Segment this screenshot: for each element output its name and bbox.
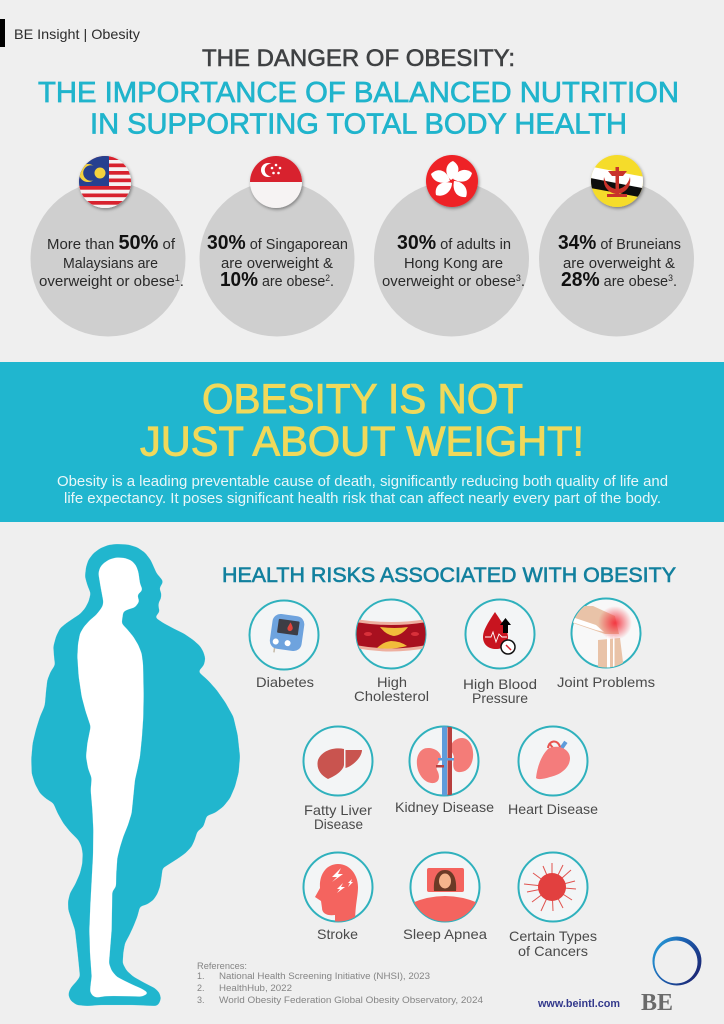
text: Brunei statistic (558, 232, 681, 291)
risk: joint problems (557, 598, 655, 690)
text: Singapore statistic (207, 232, 348, 291)
label: Fatty Liver (304, 802, 372, 818)
text: Malaysia statistic: . (180, 273, 184, 290)
label: High Blood (463, 676, 537, 692)
logo: BE: BE (641, 990, 673, 1016)
icon: Singapore flag (250, 156, 302, 208)
banner body text (57, 473, 668, 507)
icon: blood drop, arrow and gauge (483, 612, 515, 654)
banner: obesity is not just about weight (0, 362, 724, 522)
text: Malaysia statistic: More than 50% of (47, 232, 176, 254)
label (304, 802, 372, 832)
references: References: (197, 961, 247, 971)
icon: glucose meter (268, 613, 305, 656)
text: Brunei statistic: 34% of Bruneians (558, 232, 681, 254)
text: Hong Kong statistic: 3 (516, 273, 521, 283)
panel: Hong Kong statistic (374, 155, 529, 336)
risk: kidney disease (395, 726, 494, 815)
label: Sleep Apnea (403, 926, 487, 942)
icon: Brunei flag (585, 155, 650, 207)
label: Kidney Disease (395, 799, 494, 815)
section tag: BE Insight | Obesity: BE Insight | Obesity (14, 26, 140, 42)
heading: health risks: HEALTH RISKS ASSOCIATED WITH OBESITY (222, 564, 676, 587)
text: Singapore statistic: 10% are obese (220, 269, 329, 291)
risk: cancers (509, 852, 597, 959)
text: Hong Kong statistic (382, 232, 525, 290)
text: Malaysia statistic: Malaysians are (63, 255, 158, 272)
section tag: BE Insight | Obesity (0, 19, 140, 47)
icon: kidneys (417, 726, 473, 796)
references: 2. (197, 983, 205, 993)
banner heading (140, 375, 584, 464)
references (197, 961, 483, 1005)
text: Brunei statistic: are overweight & (563, 255, 675, 272)
label: Certain Types (509, 928, 597, 944)
risk: fatty liver disease (304, 726, 372, 832)
website: www.beintl.com (537, 998, 620, 1010)
text: Hong Kong statistic: Hong Kong are (404, 255, 503, 272)
label (463, 676, 537, 706)
references: World Obesity Federation Global Obesity Observatory, 2024 (219, 995, 483, 1005)
title: THE IMPORTANCE OF BALANCED NUTRITION (38, 77, 679, 109)
risk: high cholesterol (354, 600, 429, 704)
text: Brunei statistic: 3 (668, 273, 673, 283)
label: Diabetes (256, 674, 314, 690)
banner body text: Obesity is a leading preventable cause of death, significantly reducing both quality of life and (57, 473, 668, 490)
icon: Malaysia flag (79, 156, 131, 208)
label: Pressure (472, 690, 528, 706)
label: Disease (314, 816, 363, 832)
references: 1. (197, 971, 205, 981)
label: Stroke (317, 926, 358, 942)
title (38, 45, 679, 140)
text: Brunei statistic: . (673, 273, 677, 290)
icon: sleeping person (414, 868, 476, 922)
text: Malaysia statistic (39, 232, 184, 290)
risk: stroke (304, 852, 372, 942)
panel: Singapore statistic (200, 156, 354, 336)
obese outline (31, 544, 240, 1006)
banner body text: life expectancy. It poses significant health risk that can affect nearly every part of the body. (64, 490, 661, 507)
references: National Health Screening Initiative (NHSI), 2023 (219, 971, 430, 981)
label (354, 674, 429, 704)
icon: knee joint (570, 606, 632, 670)
icon: liver (317, 748, 362, 779)
body silhouette: obese outline with lean figure (31, 544, 240, 1006)
panel: Brunei statistic (539, 155, 694, 336)
lean figure (77, 557, 149, 998)
icon: head with lightning (315, 864, 358, 925)
logo: BE (641, 936, 701, 1016)
text: Singapore statistic: 30% of Singaporean (207, 232, 348, 254)
risk: sleep apnea (403, 852, 487, 942)
text: Malaysia statistic: 1 (175, 273, 180, 283)
label: High (377, 674, 407, 690)
references: HealthHub, 2022 (219, 983, 292, 993)
risk: heart disease (508, 726, 598, 817)
risk: diabetes (250, 600, 318, 690)
text: Malaysia statistic: overweight or obese (39, 273, 174, 290)
references: 3. (197, 995, 205, 1005)
text: Brunei statistic: 28% are obese (561, 269, 671, 291)
label (509, 928, 597, 959)
label: Joint Problems (557, 674, 655, 690)
icon: blood vessel with plaque (355, 619, 427, 652)
text: Hong Kong statistic: 30% of adults in (397, 232, 511, 254)
title: THE DANGER OF OBESITY: (202, 45, 515, 72)
panel: Malaysia statistic (30, 156, 186, 336)
banner heading: JUST ABOUT WEIGHT! (140, 418, 584, 464)
icon: Hong Kong flag (426, 155, 478, 207)
icon: cancer cell (524, 863, 576, 911)
text: Hong Kong statistic: overweight or obese (382, 273, 517, 290)
risk: high blood pressure (463, 600, 537, 706)
title: IN SUPPORTING TOTAL BODY HEALTH (90, 108, 627, 140)
icon: heart (536, 741, 570, 779)
text: Singapore statistic: are overweight & (221, 255, 333, 272)
label: Cholesterol (354, 688, 429, 704)
text: Singapore statistic: 2 (325, 273, 330, 283)
text: Singapore statistic: . (330, 273, 334, 290)
label: of Cancers (518, 943, 588, 959)
banner heading: OBESITY IS NOT (202, 375, 523, 422)
label: Heart Disease (508, 801, 598, 817)
text: Hong Kong statistic: . (521, 273, 525, 290)
